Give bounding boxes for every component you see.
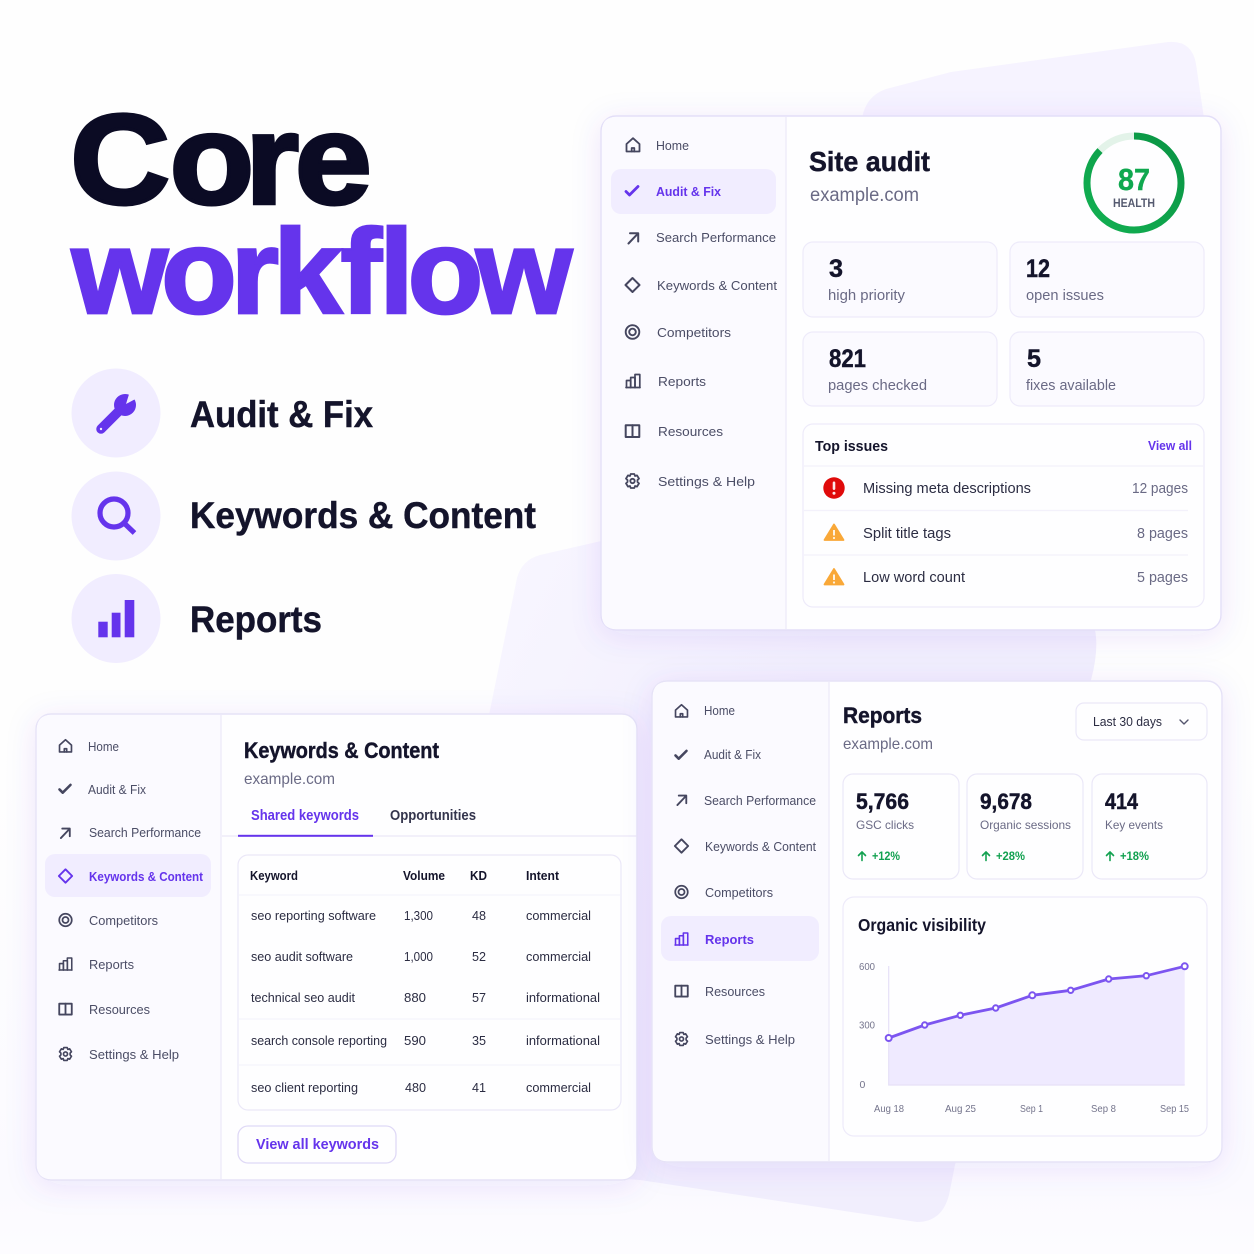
heading: reports: example.com bbox=[843, 736, 933, 753]
table row 2: 1,000 bbox=[404, 950, 433, 964]
heading: site audit bbox=[809, 146, 930, 206]
table row 1: 48 bbox=[472, 909, 486, 923]
table row 2: 52 bbox=[472, 950, 486, 964]
issue row: missing meta descriptions: 12 pages bbox=[1132, 481, 1188, 497]
area under line bbox=[889, 966, 1185, 1085]
health gauge bbox=[1087, 136, 1181, 230]
heading: keywords and content: Keywords & Content bbox=[244, 738, 440, 763]
top issues list: Top issues bbox=[815, 438, 888, 455]
y axis labels: 600 bbox=[859, 961, 875, 973]
metric card: GSC clicks bbox=[843, 774, 959, 879]
sidebar navigation: site audit: Reports bbox=[658, 374, 707, 389]
sidebar navigation: site audit: Home bbox=[656, 138, 689, 153]
metric card: organic sessions bbox=[967, 774, 1083, 879]
heading: reports bbox=[843, 703, 933, 753]
sidebar navigation: site audit: Settings & Help bbox=[658, 474, 755, 489]
sidebar navigation: keywords: Keywords & Content bbox=[89, 869, 204, 884]
sidebar navigation: reports: Resources bbox=[705, 984, 765, 999]
health gauge: HEALTH bbox=[1113, 196, 1155, 210]
issue row: split title tags: 8 pages bbox=[1137, 526, 1188, 542]
stat card: open issues: 12 bbox=[1026, 255, 1050, 283]
stat card: pages checked: pages checked bbox=[828, 377, 927, 394]
table row 3: informational bbox=[526, 991, 600, 1005]
sidebar navigation: reports: Reports bbox=[705, 932, 754, 947]
table row 4: informational bbox=[526, 1034, 600, 1048]
sidebar navigation: reports: Competitors bbox=[705, 885, 773, 900]
stat card: high priority: 3 bbox=[829, 255, 843, 283]
table header: Volume bbox=[403, 869, 445, 883]
title bbox=[70, 88, 572, 339]
table row 2 bbox=[251, 950, 591, 964]
feature: Reports: Reports bbox=[190, 599, 322, 640]
feature: Keywords & Content bbox=[72, 472, 536, 560]
feature: Audit & Fix: Audit & Fix bbox=[190, 394, 373, 435]
table header bbox=[250, 869, 560, 883]
stat card: high priority bbox=[803, 242, 997, 317]
panel: site audit bbox=[601, 116, 1221, 630]
table row 3: 57 bbox=[472, 991, 486, 1005]
issue row: missing meta descriptions: Missing meta descriptions bbox=[863, 480, 1031, 497]
metric card: GSC clicks: GSC clicks bbox=[856, 818, 914, 832]
x axis labels: Aug 18 bbox=[874, 1103, 904, 1115]
y axis labels: 0 bbox=[860, 1079, 866, 1091]
date range dropdown bbox=[1076, 703, 1207, 740]
top issues list: View all bbox=[1148, 438, 1192, 453]
sidebar navigation: keywords: Audit & Fix bbox=[88, 782, 146, 797]
heading: keywords and content bbox=[244, 738, 440, 788]
chart: organic visibility: Organic visibility bbox=[858, 915, 986, 935]
top issues list bbox=[803, 424, 1204, 607]
title: workflow bbox=[71, 205, 572, 339]
x axis labels bbox=[874, 1103, 1189, 1115]
title: Core bbox=[70, 88, 372, 231]
x axis labels: Sep 15 bbox=[1160, 1103, 1189, 1115]
y axis labels bbox=[859, 961, 875, 1091]
table row 1 bbox=[251, 909, 591, 923]
sidebar navigation: site audit: Resources bbox=[658, 424, 724, 439]
issue row: low word count: Low word count bbox=[863, 569, 966, 586]
stat card: open issues: open issues bbox=[1026, 287, 1104, 304]
heading: keywords and content: example.com bbox=[244, 771, 335, 788]
date range dropdown: Last 30 days bbox=[1093, 715, 1162, 729]
metric card: organic sessions: Organic sessions bbox=[980, 818, 1071, 832]
sidebar navigation: site audit: Competitors bbox=[657, 325, 732, 340]
sidebar navigation: reports: Settings & Help bbox=[705, 1032, 795, 1047]
metric card: key events: Key events bbox=[1105, 818, 1163, 832]
sidebar navigation: keywords: Search Performance bbox=[89, 825, 201, 840]
heading: site audit: Site audit bbox=[809, 146, 930, 177]
sidebar navigation: reports bbox=[661, 703, 819, 1047]
issue row: low word count: 5 pages bbox=[1137, 570, 1188, 586]
sidebar navigation: keywords: Home bbox=[88, 739, 119, 754]
table row 3: 880 bbox=[404, 991, 426, 1005]
issue row: split title tags: Split title tags bbox=[863, 525, 951, 542]
sidebar navigation: keywords: Reports bbox=[89, 957, 134, 972]
table row 5: 41 bbox=[472, 1081, 486, 1095]
metric card: key events: +18% bbox=[1120, 849, 1149, 863]
trend line bbox=[886, 963, 1188, 1041]
sidebar navigation: reports: Keywords & Content bbox=[705, 839, 816, 854]
table header: KD bbox=[470, 869, 487, 883]
tabs: Shared keywords bbox=[251, 808, 359, 824]
table row 5: 480 bbox=[405, 1081, 426, 1095]
issue row: low word count bbox=[824, 569, 1188, 586]
table row 5: commercial bbox=[526, 1081, 591, 1095]
issue row: missing meta descriptions bbox=[823, 477, 1188, 499]
metric card: key events bbox=[1092, 774, 1207, 879]
table row 4 bbox=[251, 1034, 600, 1048]
y axis labels: 300 bbox=[859, 1020, 875, 1032]
metric card: organic sessions: 9,678 bbox=[980, 789, 1032, 814]
table row 3: technical seo audit bbox=[251, 991, 356, 1005]
button: view all keywords: View all keywords bbox=[256, 1136, 379, 1153]
table row 2: seo audit software bbox=[251, 950, 353, 964]
sidebar navigation: site audit: Keywords & Content bbox=[657, 278, 777, 293]
sidebar navigation: keywords: Resources bbox=[89, 1002, 150, 1017]
table row 4: 590 bbox=[404, 1034, 426, 1048]
chart: organic visibility bbox=[843, 897, 1207, 1136]
feature: Reports bbox=[72, 574, 322, 663]
button: view all keywords bbox=[238, 1126, 396, 1163]
stat card: fixes available bbox=[1010, 332, 1204, 406]
sidebar navigation: keywords: Competitors bbox=[89, 913, 158, 928]
table row 4: 35 bbox=[472, 1034, 486, 1048]
stat card: high priority: high priority bbox=[828, 287, 905, 304]
background decorative shapes bbox=[489, 42, 1205, 1222]
heading: site audit: example.com bbox=[810, 185, 919, 206]
table row 5 bbox=[251, 1081, 591, 1095]
keyword table bbox=[238, 855, 621, 1110]
table row 5: seo client reporting bbox=[251, 1081, 358, 1095]
metric card: GSC clicks: 5,766 bbox=[856, 789, 909, 814]
heading: reports: Reports bbox=[843, 703, 922, 728]
sidebar navigation: site audit: Audit & Fix bbox=[656, 184, 722, 199]
sidebar navigation: keywords bbox=[45, 739, 211, 1062]
x axis labels: Aug 25 bbox=[945, 1103, 976, 1115]
metric card: key events: 414 bbox=[1105, 789, 1139, 814]
health gauge: 87 bbox=[1118, 162, 1150, 197]
table row 2: commercial bbox=[526, 950, 591, 964]
table row 4: search console reporting bbox=[251, 1034, 387, 1048]
feature list bbox=[72, 368, 536, 663]
table row 3 bbox=[251, 991, 600, 1005]
issue row: split title tags bbox=[824, 524, 1188, 542]
sidebar navigation: reports: Home bbox=[704, 703, 735, 718]
tabs: Opportunities bbox=[390, 808, 476, 824]
panel: reports bbox=[652, 681, 1222, 1162]
table row 1: 1,300 bbox=[404, 909, 433, 923]
metric card: GSC clicks: +12% bbox=[872, 849, 900, 863]
table header: Keyword bbox=[250, 869, 298, 883]
table row 1: seo reporting software bbox=[251, 909, 376, 923]
metric card: organic sessions: +28% bbox=[996, 849, 1025, 863]
sidebar navigation: site audit bbox=[611, 138, 777, 489]
x axis labels: Sep 1 bbox=[1020, 1103, 1043, 1115]
sidebar navigation: keywords: Settings & Help bbox=[89, 1047, 179, 1062]
stat card: fixes available: 5 bbox=[1027, 345, 1041, 373]
sidebar navigation: reports: Audit & Fix bbox=[704, 747, 761, 762]
sidebar navigation: site audit: Search Performance bbox=[656, 230, 776, 245]
tabs bbox=[222, 808, 637, 837]
panel: keywords and content bbox=[36, 714, 637, 1180]
x axis labels: Sep 8 bbox=[1091, 1103, 1116, 1115]
sidebar navigation: reports: Search Performance bbox=[704, 793, 816, 808]
table row 1: commercial bbox=[526, 909, 591, 923]
table header: Intent bbox=[526, 869, 560, 883]
stat card: pages checked bbox=[803, 332, 997, 406]
stat card: pages checked: 821 bbox=[829, 345, 866, 373]
stat card: open issues bbox=[1010, 242, 1204, 317]
feature: Keywords & Content: Keywords & Content bbox=[190, 495, 536, 536]
feature: Audit & Fix bbox=[72, 368, 373, 458]
stat card: fixes available: fixes available bbox=[1026, 377, 1116, 394]
